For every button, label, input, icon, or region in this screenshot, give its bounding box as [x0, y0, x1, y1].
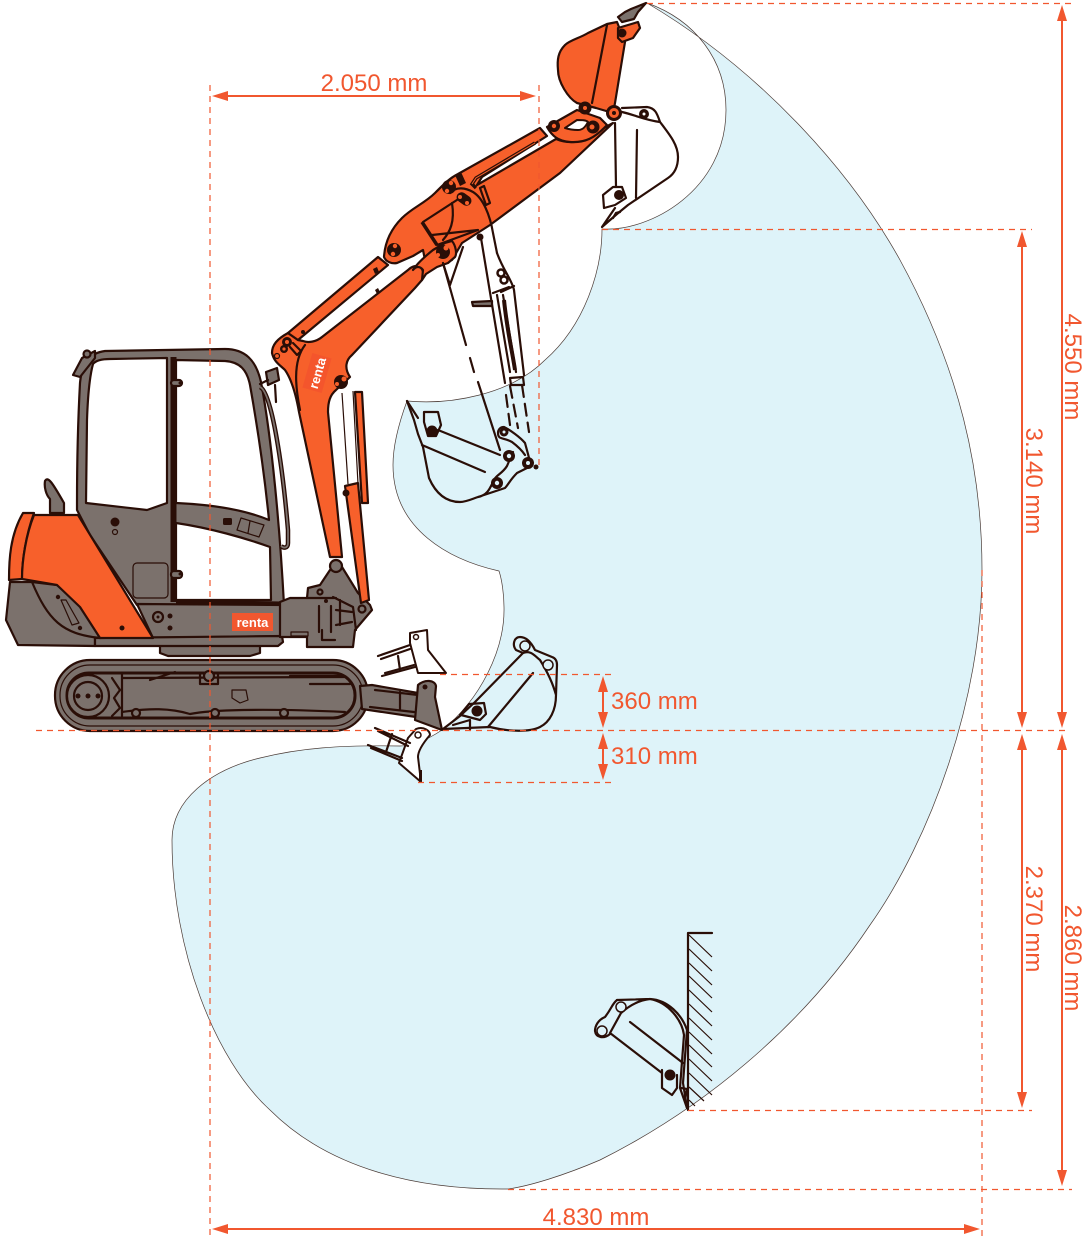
dimension: 360 mm: 360 mm — [611, 688, 698, 715]
working range area — [172, 3, 982, 1189]
dimension: 310 mm: 310 mm — [611, 743, 698, 770]
rear orange engine hood — [9, 513, 153, 638]
arm details — [387, 172, 497, 259]
rear side panel — [32, 582, 100, 638]
excavator: cab frame — [77, 349, 284, 605]
dimension: 2.050 mm: 2.050 mm — [321, 70, 427, 97]
bucket in trench — [595, 999, 687, 1108]
renta badge — [232, 613, 273, 631]
cab: centre pillar — [170, 357, 176, 602]
boom mounting pins — [274, 267, 380, 389]
boom swing bracket — [280, 560, 372, 647]
cab: grab rail highlight — [260, 387, 288, 548]
bucket outline second position — [602, 107, 678, 227]
bucket raised position — [558, 3, 646, 121]
cab: top lamps — [73, 350, 279, 402]
boom head link — [413, 241, 456, 280]
excavator: chassis — [95, 604, 283, 646]
dimension: 2.370 mm — [1017, 734, 1047, 1108]
dimension: 4.550 mm — [1057, 5, 1086, 728]
boom cylinder — [342, 391, 369, 603]
exhaust stack — [45, 479, 64, 513]
boom inner curve line — [296, 345, 305, 410]
upper boom cylinder — [288, 257, 388, 340]
bucket lower reach position — [407, 401, 538, 502]
renta label on boom — [302, 353, 332, 393]
cab: grab rail — [260, 387, 288, 548]
arm lowered position outline — [443, 234, 529, 450]
trench wall — [688, 933, 712, 1110]
dimension: 360 mm — [598, 676, 698, 728]
renta label on boom: renta — [306, 355, 329, 390]
dimension: 3.140 mm — [1017, 231, 1047, 728]
cab: lower sill band — [176, 602, 282, 604]
dimension: 4.830 mm: 4.830 mm — [543, 1204, 649, 1231]
arm — [384, 123, 613, 265]
bucket ground position — [443, 637, 557, 731]
arm cylinder rod highlight — [472, 143, 535, 184]
excavator: undercarriage track — [55, 660, 368, 731]
cab: door details — [110, 380, 264, 598]
dozer blade lowered — [368, 728, 430, 783]
dimension: 4.550 mm: 4.550 mm — [1059, 314, 1086, 420]
boom — [272, 266, 423, 557]
renta badge: renta — [237, 615, 269, 630]
arm cylinder rod — [472, 143, 535, 188]
dozer blade middle — [360, 681, 442, 730]
dimension: 2.860 mm — [1057, 734, 1086, 1186]
dimension: 3.140 mm: 3.140 mm — [1020, 428, 1047, 534]
dimension: 2.050 mm — [212, 70, 536, 101]
excavator: turret ring — [160, 645, 260, 656]
excavator: grey body base — [6, 582, 100, 646]
arm tip link — [547, 110, 607, 142]
dozer blade raised — [378, 630, 446, 676]
dimension: 2.860 mm: 2.860 mm — [1059, 905, 1086, 1011]
dimension: 2.370 mm: 2.370 mm — [1020, 866, 1047, 972]
dimension: 4.830 mm — [212, 1204, 980, 1234]
dimension: 310 mm — [598, 733, 698, 780]
